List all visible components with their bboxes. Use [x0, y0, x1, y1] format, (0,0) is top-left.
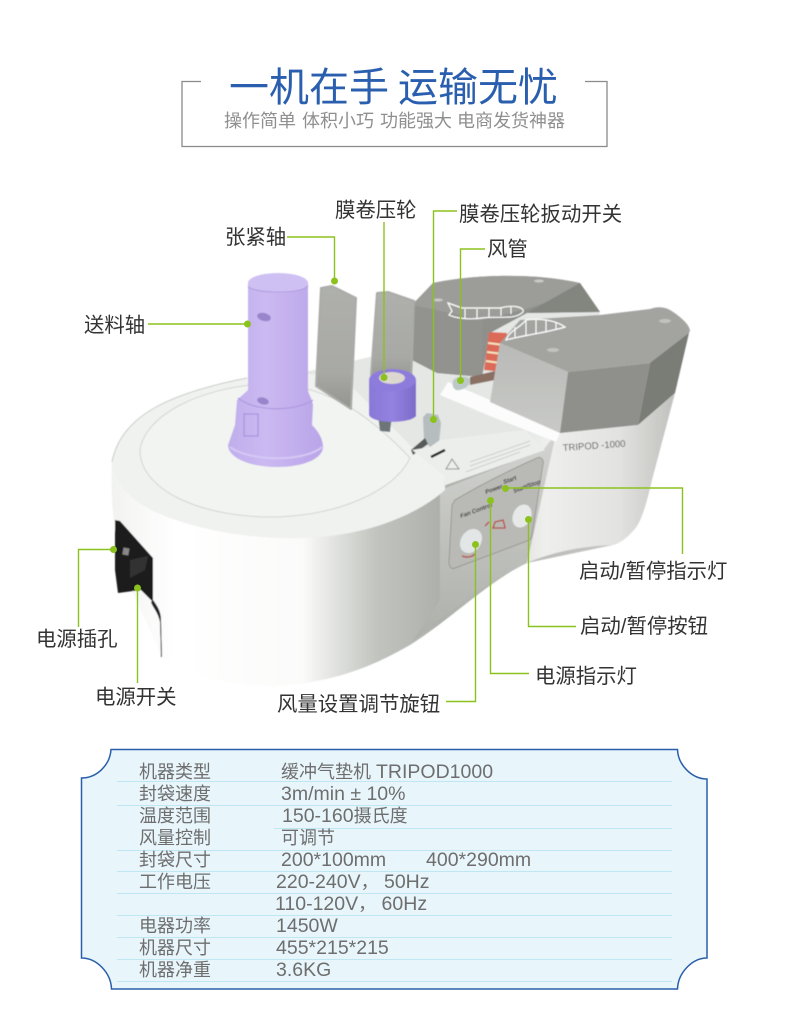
callout: start stop indicator: 启动/暂停指示灯: [579, 560, 727, 583]
power label: Power: [485, 484, 504, 496]
row: air control: [139, 828, 335, 848]
start label: Start: [503, 475, 518, 486]
collar tab: [244, 414, 258, 436]
fan control label: Fan Control: [460, 503, 494, 520]
callout: press wheel switch: [430, 203, 622, 423]
callout: start stop indicator: [502, 485, 727, 583]
row: bag size: 400*290mm: [426, 849, 531, 871]
hatch marks: [506, 319, 565, 340]
tension plate: [316, 286, 356, 409]
callout: power socket: [36, 546, 118, 651]
row: machine type: [139, 761, 493, 783]
inner disc: [140, 384, 410, 517]
film roller: [369, 380, 416, 422]
callout: air volume knob: [277, 541, 479, 716]
bolt: [547, 348, 559, 352]
control panel: [449, 457, 543, 569]
row: speed: [139, 783, 406, 805]
shaft hole: [256, 311, 272, 323]
callout: air tube: [457, 238, 528, 384]
machine illustration: [111, 273, 690, 686]
white strip under front block: [440, 382, 560, 442]
power cord: [151, 600, 162, 657]
subtitle: [224, 111, 565, 131]
switch lever: [423, 413, 441, 447]
row: net weight: 机器净重: [139, 960, 211, 980]
label icon: [431, 450, 445, 457]
row: air control: 风量控制: [139, 828, 211, 848]
roller stem: [378, 415, 392, 432]
press plate: [371, 292, 414, 385]
row: temperature: 150-160摄氏度: [282, 805, 408, 827]
row: machine type: 机器类型: [139, 762, 211, 782]
fan knob: [455, 525, 487, 557]
callout: film press wheel: [335, 199, 417, 381]
feed shaft: [228, 273, 323, 467]
subtitle: 功能强大: [380, 111, 452, 131]
callout: start stop button: [525, 516, 708, 638]
row: temperature: [139, 805, 408, 827]
callout: air volume knob: 风量设置调节旋钮: [277, 693, 440, 716]
row: voltage: [139, 871, 430, 893]
top plate: [112, 374, 445, 538]
callout: start stop button: 启动/暂停按钮: [580, 615, 708, 638]
red fan graphic: [462, 520, 505, 557]
row: machine type: 缓冲气垫机 TRIPOD1000: [281, 761, 493, 783]
callout: tension shaft: [225, 226, 338, 284]
callout: feed shaft: 送料轴: [84, 314, 145, 337]
subtitle: 操作简单: [224, 111, 296, 131]
panel: specification table: [82, 750, 707, 989]
row: voltage: 220-240V， 50Hz: [276, 871, 430, 893]
row: power: [139, 915, 338, 937]
callout: power socket: 电源插孔: [36, 628, 118, 651]
bolt: [433, 298, 443, 302]
row: power: 1450W: [276, 915, 338, 937]
row: power: 电器功率: [139, 916, 211, 936]
front block: [490, 307, 690, 433]
callout: power indicator: 电源指示灯: [535, 665, 637, 688]
right lower body: [490, 393, 675, 565]
model name: TRIPOD -1000: [562, 439, 626, 454]
callout: power switch: 电源开关: [95, 686, 177, 709]
title frame: [182, 82, 607, 146]
title: 一机在手: [229, 66, 389, 110]
callout: power indicator: [487, 497, 637, 688]
callout: tension shaft: 张紧轴: [225, 226, 286, 249]
callout: film press wheel: 膜卷压轮: [335, 199, 417, 222]
outer plate edge: [112, 378, 247, 462]
shaft hole: [256, 396, 270, 406]
row: temperature: 温度范围: [139, 806, 211, 826]
subtitle: 电商发货神器: [457, 111, 565, 131]
start stop label: Start/Stop: [513, 479, 542, 495]
red heater: [484, 332, 507, 372]
row rules: [117, 782, 672, 982]
warning triangle: [446, 459, 459, 469]
bolt: [534, 280, 544, 282]
row: bag size: 封袋尺寸: [139, 850, 211, 870]
row: machine size: 机器尺寸: [139, 938, 211, 958]
row: net weight: [139, 959, 331, 981]
row: bag size: 200*100mm: [281, 849, 386, 871]
roller top: [369, 369, 416, 391]
roller hole: [379, 372, 405, 384]
row: bag size: [139, 849, 531, 871]
switch slot: [411, 438, 428, 455]
row: air control: 可调节: [281, 828, 335, 848]
row: speed: 封袋速度: [139, 784, 211, 804]
table frame: [82, 750, 707, 989]
warning label: [412, 430, 545, 486]
back wall / deck: [305, 300, 600, 490]
row: net weight: 3.6KG: [276, 959, 331, 981]
bolt: [659, 319, 671, 323]
lower body: [111, 420, 640, 686]
power socket: [115, 520, 162, 657]
callout: air tube: 风管: [487, 238, 528, 261]
callout: press wheel switch: 膜卷压轮扳动开关: [459, 203, 622, 226]
title part two: 运输无忧: [398, 66, 558, 110]
row: machine size: [139, 937, 389, 959]
front face behind control panel: [412, 434, 556, 642]
callout: feed shaft: [84, 314, 251, 337]
hatch marks: [448, 303, 523, 319]
subtitle: 体积小巧: [302, 111, 374, 131]
row: speed: 3m/min ± 10%: [281, 783, 406, 805]
row: voltage two: 110-120V， 60Hz: [275, 893, 427, 915]
air tube: [470, 371, 495, 385]
callout: power switch: [95, 584, 177, 709]
back block: [412, 276, 600, 377]
row: voltage: 工作电压: [139, 872, 211, 892]
small print: [466, 441, 530, 472]
row: machine size: 455*215*215: [276, 937, 389, 959]
start knob: [509, 501, 535, 531]
